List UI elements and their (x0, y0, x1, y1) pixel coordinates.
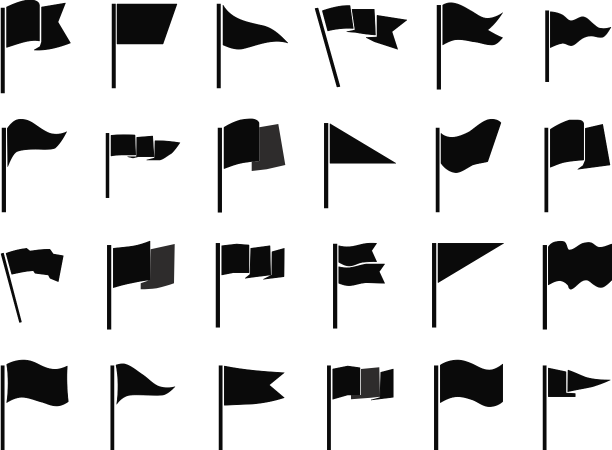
flag 13: tilted ribbon (1, 248, 63, 322)
flag 16: double swallowtail (333, 243, 385, 328)
flag 11: rising wave (436, 119, 501, 212)
flag 20: small curved pennant (111, 364, 175, 450)
flag 21: straight swallowtail (219, 366, 284, 450)
flag 17: inverted triangle (432, 243, 504, 327)
flag 19: wavy banner (1, 360, 68, 450)
flag 23: large wavy banner (434, 360, 503, 450)
flag 24: fold with pennant (543, 366, 610, 450)
flag 2: trapezoid (112, 4, 177, 88)
flag 1: two-fold swallowtail (1, 0, 70, 93)
flag 18: ruffled banner (543, 241, 612, 329)
flag 12: fold with hook (545, 120, 610, 212)
flag 8: three-fold small (106, 133, 180, 198)
flag 9: two-tone fold (218, 119, 285, 212)
flag 5: wavy swallowtail (437, 3, 503, 89)
flag 3: wavy pennant (217, 4, 288, 88)
flag 6: wavy pennant small (546, 11, 611, 82)
flag 15: three-panel (216, 243, 284, 327)
flag 14: two-tone straight (107, 241, 175, 329)
flag 7: curved pennant (2, 119, 67, 212)
flag 4: tilted three-fold (315, 5, 407, 87)
flag 22: two-tone three-panel (327, 366, 393, 450)
flag 10: right triangle (324, 123, 396, 208)
